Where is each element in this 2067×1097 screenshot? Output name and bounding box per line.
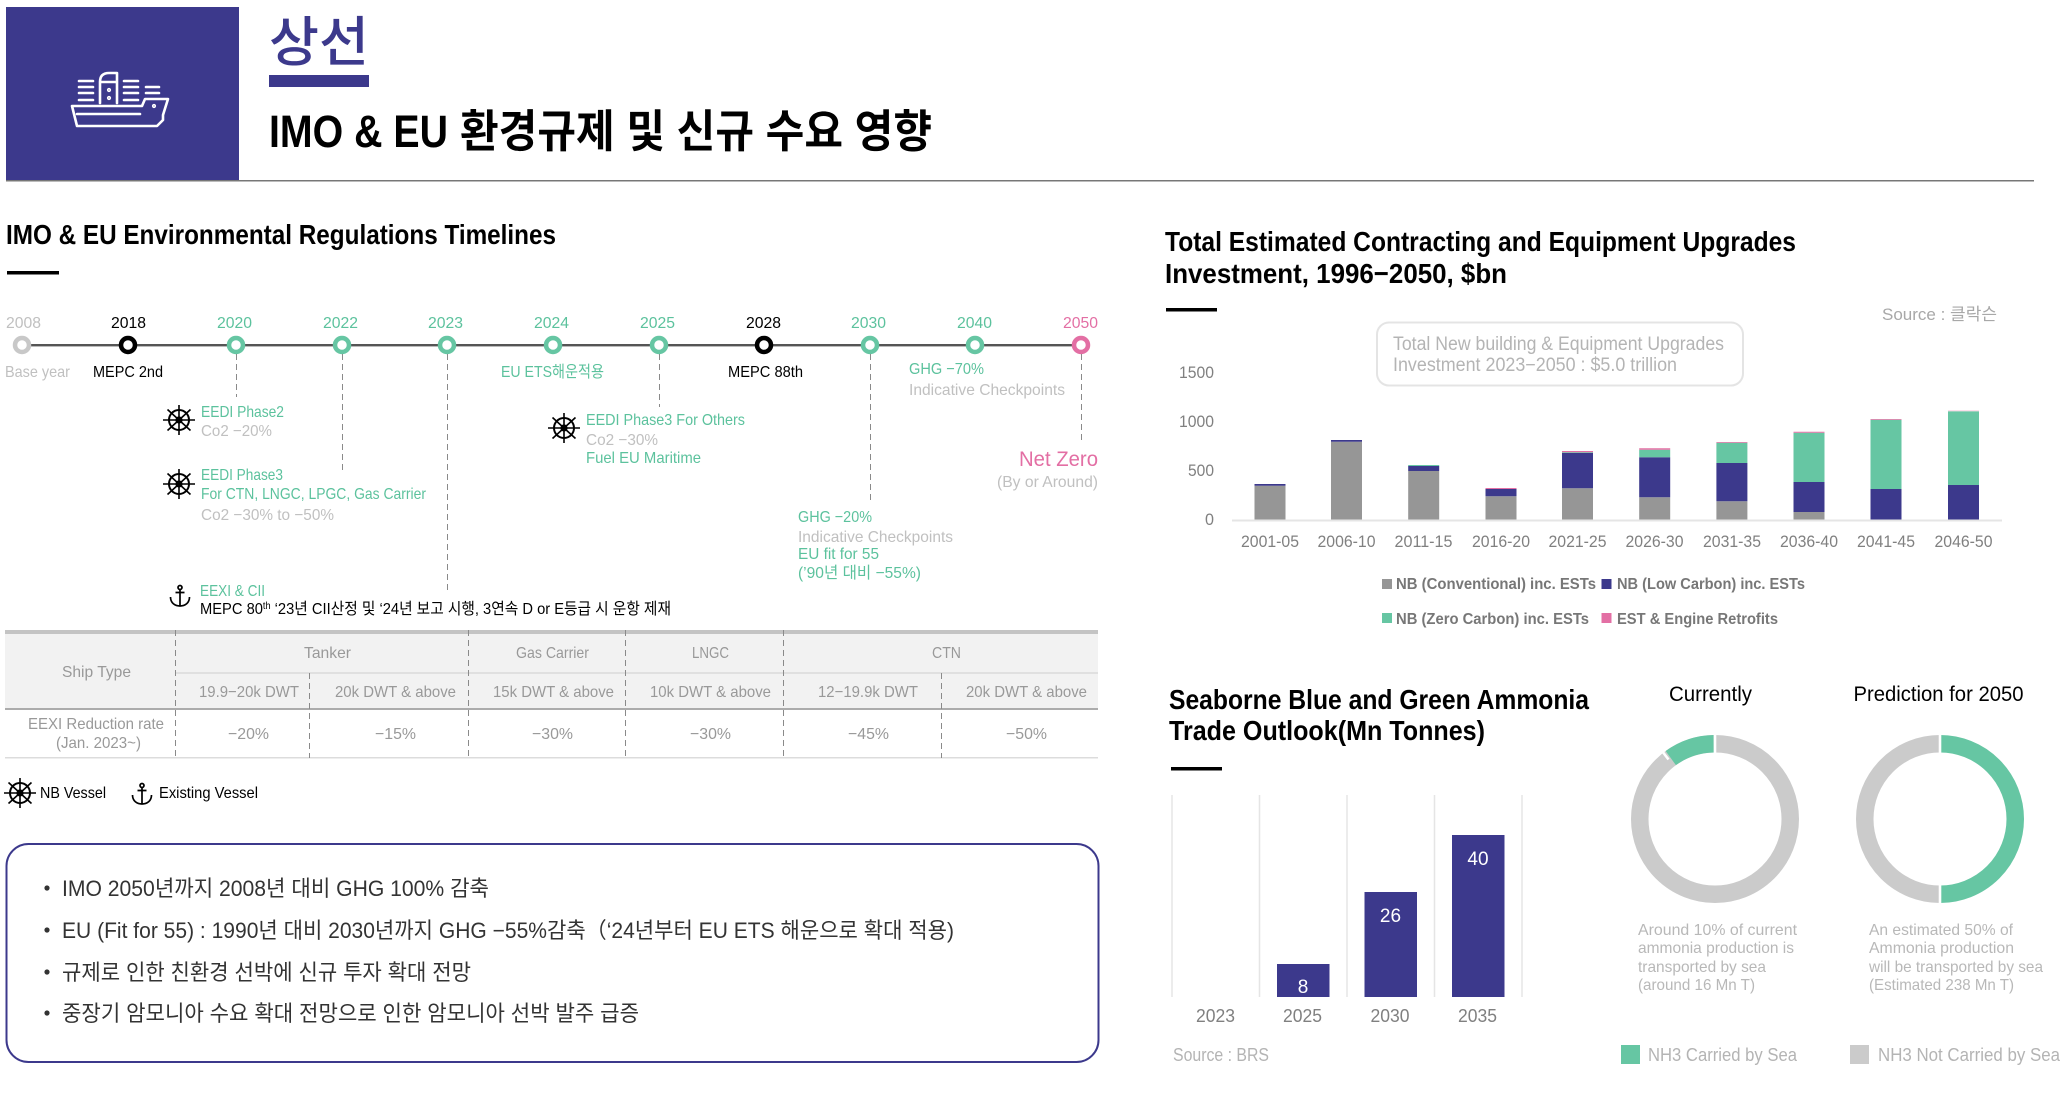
callout: GHG -20% <box>798 509 953 582</box>
callout: GHG -20%: (’90년 대비 −55%) <box>798 564 921 582</box>
y axis labels: 1500 <box>1179 363 1214 382</box>
callout: EEDI Phase3 For Others: EEDI Phase3 For Others <box>586 412 745 429</box>
legend: donut charts: NH3 Carried by Sea <box>1648 1045 1798 1065</box>
x axis labels: 2011-15 <box>1394 532 1452 551</box>
callout: EEDI Phase3 For Others <box>548 412 745 467</box>
caption: prediction: Ammonia production <box>1869 940 2014 957</box>
table header: Tanker <box>304 645 352 662</box>
chart legend: NB (Low Carbon) inc. ESTs <box>1617 576 1805 593</box>
callout: EEXI and CII <box>170 583 671 618</box>
x axis labels: 2001-05 <box>1241 532 1299 551</box>
table values: EEXI Reduction rate <box>28 716 164 733</box>
caption: prediction: An estimated 50% of <box>1869 922 2014 939</box>
legend: donut charts <box>1621 1045 2061 1065</box>
title <box>269 106 932 157</box>
x axis labels: 2021-25 <box>1548 532 1606 551</box>
table header: Gas Carrier <box>516 645 590 662</box>
callout: EEDI Phase2 <box>163 404 284 440</box>
table header: CTN <box>932 645 961 662</box>
timeline milestone labels: Indicative Checkpoints <box>909 382 1065 399</box>
callout: EEDI Phase3 For Others: Co2 −30% <box>586 432 658 449</box>
donut chart: currently: Currently <box>1669 683 1752 706</box>
chart legend <box>1382 576 1805 628</box>
panel: key takeaways: EU (Fit for 55) : 1990년 대비 2030년까지 GHG −55%감축（‘24년부터 EU ETS 해운으로 확대 적용) <box>62 918 954 943</box>
callout: EEXI and CII: th <box>263 601 271 612</box>
table values: −15% <box>375 726 416 743</box>
heading: timelines: IMO & EU Environmental Regulations Timelines <box>6 219 556 250</box>
bar values: 8 <box>1298 977 1308 998</box>
heading: ammonia outlook <box>1169 684 1589 770</box>
x axis labels: 2046-50 <box>1934 532 1992 551</box>
table header: 20k DWT & above <box>966 684 1087 701</box>
table values: −45% <box>848 726 889 743</box>
legend: vessel types <box>4 778 258 808</box>
caption: prediction: (Estimated 238 Mn T) <box>1869 977 2014 994</box>
x axis labels: 2036-40 <box>1780 532 1838 551</box>
timeline years: 2018 <box>111 315 146 332</box>
timeline milestone labels: EU ETS해운적용 <box>501 363 604 381</box>
timeline years: 2022 <box>323 315 358 332</box>
timeline years: 2030 <box>851 315 886 332</box>
y axis labels: 0 <box>1205 510 1214 529</box>
donut chart: prediction for 2050: Prediction for 2050 <box>1854 683 2024 706</box>
caption: currently <box>1638 922 1798 994</box>
table values <box>28 716 1047 752</box>
y axis labels <box>1179 363 1214 529</box>
bar years <box>1196 1006 1497 1026</box>
source: BRS: Source : BRS <box>1173 1045 1269 1065</box>
title: 환경규제 및 신규 수요 영향 <box>460 106 932 157</box>
table header: LNGC <box>692 645 729 662</box>
callout: EEXI and CII: ‘23년 CII산정 및 ‘24년 보고 시행, 3연속 D or E등급 시 운항 제재 <box>271 600 671 618</box>
table header: 19.9−20k DWT <box>199 684 299 701</box>
bar years: 2035 <box>1458 1006 1497 1026</box>
y axis labels: 500 <box>1188 461 1214 480</box>
panel: key takeaways <box>6 844 1098 1062</box>
timeline milestone labels <box>5 361 1065 399</box>
table values: −20% <box>228 726 269 743</box>
callout: GHG -20%: GHG −20% <box>798 509 872 526</box>
x axis labels: 2006-10 <box>1318 532 1376 551</box>
table header <box>62 645 1087 701</box>
panel: key takeaways: 규제로 인한 친환경 선박에 신규 투자 확대 전망 <box>62 960 471 985</box>
table: EEXI reduction rate <box>5 630 1098 758</box>
timeline milestone labels: MEPC 88th <box>728 364 803 381</box>
timeline years: 2020 <box>217 315 252 332</box>
timeline years: 2024 <box>534 315 569 332</box>
caption: prediction <box>1868 922 2043 994</box>
callout: EEDI Phase3: For CTN, LNGC, LPGC, Gas Carrier <box>201 486 427 503</box>
table header: 15k DWT & above <box>493 684 614 701</box>
bar years: 2023 <box>1196 1006 1235 1026</box>
callout: GHG -20%: Indicative Checkpoints <box>798 529 953 546</box>
table header: Ship Type <box>62 664 131 681</box>
callout: Net Zero: Net Zero <box>1019 448 1098 471</box>
bar years: 2030 <box>1370 1006 1410 1026</box>
table header: 12−19.9k DWT <box>818 684 918 701</box>
chart legend: EST & Engine Retrofits <box>1617 611 1778 628</box>
callout: EEXI and CII: MEPC 80 <box>200 601 268 618</box>
x axis labels: 2041-45 <box>1857 532 1915 551</box>
heading: ammonia outlook: Seaborne Blue and Green Ammonia <box>1169 684 1589 715</box>
table header: 20k DWT & above <box>335 684 456 701</box>
caption: currently: ammonia production is <box>1638 940 1794 957</box>
timeline years: 2028 <box>746 315 781 332</box>
timeline years: 2025 <box>640 315 675 332</box>
timeline years: 2050 <box>1063 315 1098 332</box>
callout: Net Zero <box>997 448 1098 491</box>
timeline axis and nodes <box>15 338 1088 352</box>
callout: total investment: Investment 2023−2050 : $5.0 trillion <box>1393 355 1677 376</box>
legend: donut charts: NH3 Not Carried by Sea <box>1878 1045 2061 1065</box>
callout: EEXI and CII: EEXI & CII <box>200 583 265 600</box>
bar values: 40 <box>1467 849 1489 870</box>
caption: currently: (around 16 Mn T) <box>1638 977 1755 994</box>
bar years: 2025 <box>1283 1006 1322 1026</box>
callout: Net Zero: (By or Around) <box>997 474 1098 491</box>
donut chart: prediction for 2050 <box>1854 683 2043 994</box>
caption: currently: Around 10% of current <box>1638 922 1798 939</box>
chart legend: NB (Zero Carbon) inc. ESTs <box>1396 611 1589 628</box>
y axis labels: 1000 <box>1179 412 1214 431</box>
timeline milestone labels: GHG −70% <box>909 361 984 378</box>
caption: prediction: will be transported by sea <box>1868 959 2043 976</box>
callout: EEDI Phase2: Co2 −20% <box>201 423 272 440</box>
x axis labels: 2026-30 <box>1626 532 1684 551</box>
panel: header icon block <box>6 7 239 180</box>
heading: investment chart: Total Estimated Contracting and Equipment Upgrades <box>1165 226 1796 257</box>
bar values <box>1298 849 1489 998</box>
heading: ammonia outlook: Trade Outlook(Mn Tonnes) <box>1169 715 1485 746</box>
panel: key takeaways: 중장기 암모니아 수요 확대 전망으로 인한 암모니아 선박 발주 급증 <box>62 1001 639 1026</box>
table values: −30% <box>532 726 573 743</box>
timeline chart <box>5 315 1098 618</box>
legend: vessel types: NB Vessel <box>40 785 106 802</box>
timeline years: 2008 <box>6 315 41 332</box>
bar values: 26 <box>1380 906 1401 927</box>
timeline years: 2040 <box>957 315 992 332</box>
callout: EEDI Phase3: EEDI Phase3 <box>201 467 283 484</box>
table header: 10k DWT & above <box>650 684 771 701</box>
donut chart: currently <box>1638 683 1798 994</box>
callout: EEDI Phase3 For Others: Fuel EU Maritime <box>586 450 701 467</box>
icon: container ship <box>72 73 168 126</box>
table values: −30% <box>690 726 731 743</box>
heading: investment chart <box>1165 226 1796 312</box>
table values: −50% <box>1006 726 1047 743</box>
callout: EEDI Phase3: Co2 −30% to −50% <box>201 507 334 524</box>
x axis labels: 2016-20 <box>1472 532 1530 551</box>
title: IMO & EU <box>269 106 448 157</box>
timeline milestone labels: MEPC 2nd <box>93 364 163 381</box>
bar chart: ammonia trade <box>1172 795 1522 1026</box>
source: Clarksons: Source : 클락슨 <box>1882 305 1997 324</box>
chart legend: NB (Conventional) inc. ESTs <box>1396 576 1596 593</box>
timeline years: 2023 <box>428 315 463 332</box>
callout: EEDI Phase3 <box>163 467 427 524</box>
panel: key takeaways: IMO 2050년까지 2008년 대비 GHG 100% 감축 <box>62 876 489 901</box>
stacked bar chart: investment <box>1179 363 2002 628</box>
table values: (Jan. 2023~) <box>56 735 141 752</box>
heading: category 상선: 상선 <box>269 13 369 73</box>
timeline milestone labels: Base year <box>5 364 71 381</box>
bars <box>1254 410 1979 520</box>
timeline years <box>6 315 1098 332</box>
legend: vessel types: Existing Vessel <box>159 785 258 802</box>
heading: timelines <box>6 219 556 274</box>
callout: total investment: Total New building & Equipment Upgrades <box>1393 334 1724 355</box>
x axis labels: 2031-35 <box>1703 532 1761 551</box>
callout: EEDI Phase2: EEDI Phase2 <box>201 404 284 421</box>
heading: investment chart: Investment, 1996−2050, $bn <box>1165 258 1507 289</box>
callout: total investment <box>1377 322 1743 386</box>
callout: GHG -20%: EU fit for 55 <box>798 546 879 563</box>
caption: currently: transported by sea <box>1638 959 1766 976</box>
x axis labels <box>1241 532 1992 551</box>
